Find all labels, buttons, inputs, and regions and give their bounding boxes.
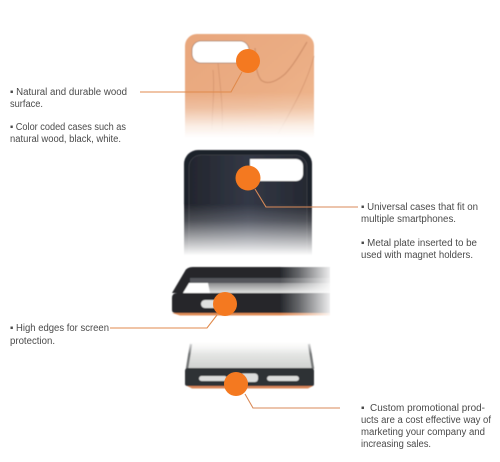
phone case, bottom view (184, 340, 316, 388)
text block: universal cases: ▪ Universal cases that fit on (361, 202, 478, 213)
callout marker: black case (236, 166, 260, 190)
text block: wood surface: ▪ Color coded cases such as (10, 122, 126, 133)
callout marker: screen edges (213, 292, 237, 316)
camera window (192, 41, 249, 63)
callout marker: promotional products (224, 372, 248, 396)
speaker slots (199, 376, 227, 381)
text block: promotional products: increasing sales. (361, 439, 431, 450)
text block: wood surface: natural wood, black, white. (10, 134, 121, 145)
text block: promotional products: marketing your company and (361, 427, 485, 438)
black phone case (180, 150, 316, 260)
text block: universal cases: used with magnet holders. (361, 250, 473, 261)
callout line: screen edges (110, 315, 217, 328)
text block: high edges (10, 323, 109, 347)
text block: promotional products: ▪ Custom promotional prod- (361, 403, 485, 414)
text block: promotional products (361, 403, 491, 450)
text block: high edges: protection. (10, 336, 55, 347)
callout line: wood case (140, 72, 242, 92)
phone case, side view (172, 262, 334, 320)
callout line: black case (255, 189, 358, 207)
callout line: promotional products (245, 394, 340, 408)
camera window (250, 159, 303, 181)
text block: universal cases: multiple smartphones. (361, 214, 456, 225)
text block: universal cases: ▪ Metal plate inserted to be (361, 238, 477, 249)
text block: wood surface: ▪ Natural and durable wood (10, 87, 127, 98)
callout marker: wood case (236, 49, 260, 73)
text block: universal cases (361, 202, 478, 261)
text block: high edges: ▪ High edges for screen (10, 323, 109, 334)
text block: promotional products: ucts are a cost effective way of (361, 415, 491, 426)
text block: wood surface: surface. (10, 99, 43, 110)
text block: wood surface (10, 87, 127, 145)
wood phone case (183, 34, 316, 138)
